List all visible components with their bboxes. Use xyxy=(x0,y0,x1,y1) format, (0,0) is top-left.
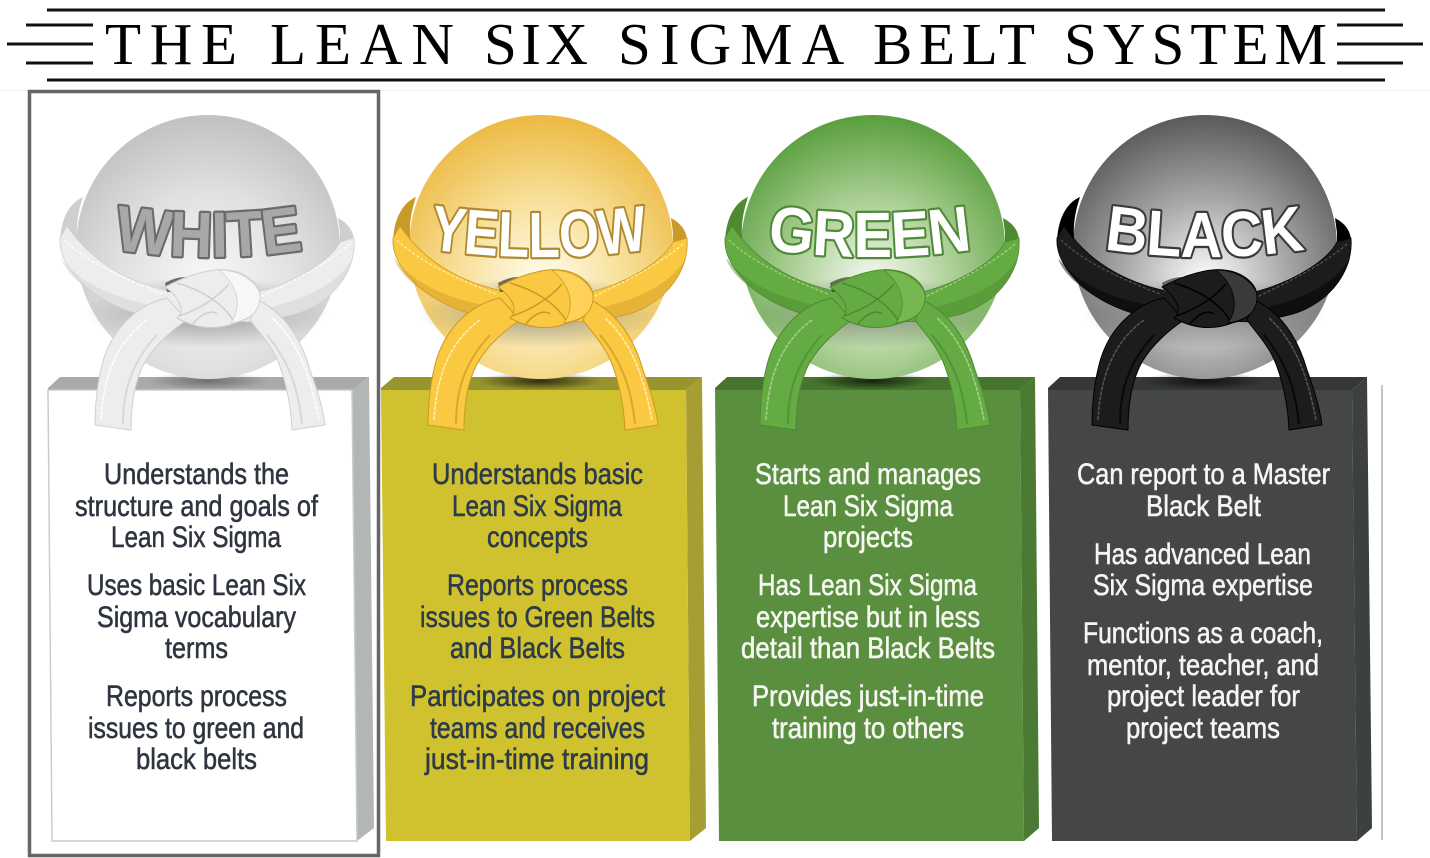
title: THE xyxy=(105,11,237,77)
black belt knot xyxy=(1057,197,1351,430)
yellow label xyxy=(433,203,646,260)
yellow belt description xyxy=(410,458,665,776)
yellow belt description: Lean Six Sigma xyxy=(452,490,622,523)
yellow belt knot xyxy=(393,197,687,430)
white sphere xyxy=(76,115,340,379)
yellow belt description: Understands basic xyxy=(432,458,643,491)
white belt description: Uses basic Lean Six xyxy=(87,569,306,602)
black belt description: Has advanced Lean xyxy=(1094,538,1311,571)
yellow belt description: Reports process xyxy=(447,569,628,602)
black belt description: project teams xyxy=(1126,712,1280,745)
black label: BLACK xyxy=(1106,204,1307,260)
black belt description xyxy=(1077,458,1330,745)
green belt description: Lean Six Sigma xyxy=(783,490,953,523)
title banner xyxy=(7,10,1423,80)
white belt description: Reports process xyxy=(106,680,287,713)
green belt description: training to others xyxy=(772,712,964,745)
green belt description: Provides just-in-time xyxy=(752,680,984,713)
green belt description: Has Lean Six Sigma xyxy=(758,569,977,602)
white belt description: Lean Six Sigma xyxy=(111,521,281,554)
green belt description: detail than Black Belts xyxy=(741,632,995,665)
green label xyxy=(770,204,970,260)
black belt description: Black Belt xyxy=(1146,490,1261,523)
yellow belt description: issues to Green Belts xyxy=(420,601,655,634)
white label xyxy=(117,204,303,260)
title: SYSTEM xyxy=(1064,11,1327,77)
green belt description: expertise but in less xyxy=(756,601,980,634)
black belt description: Six Sigma expertise xyxy=(1093,569,1313,602)
yellow belt description: and Black Belts xyxy=(450,632,625,665)
white belt description: structure and goals of xyxy=(75,490,319,523)
green belt description: Starts and manages xyxy=(755,458,981,491)
green belt description xyxy=(741,458,995,745)
panel: black belt xyxy=(1048,115,1372,841)
white belt description xyxy=(75,458,319,776)
title: SIGMA xyxy=(618,11,845,77)
white belt description: black belts xyxy=(136,743,257,776)
yellow belt description: Participates on project xyxy=(410,680,665,713)
green book block xyxy=(715,377,1039,841)
black belt description: project leader for xyxy=(1107,680,1300,713)
white belt description: issues to green and xyxy=(88,712,304,745)
title: BELT xyxy=(873,11,1035,77)
black label xyxy=(1106,204,1307,260)
white belt description: Sigma vocabulary xyxy=(97,601,296,634)
black belt description: Functions as a coach, xyxy=(1083,617,1323,650)
white book block xyxy=(48,377,374,841)
title: SIX xyxy=(484,11,588,77)
black book block xyxy=(1048,377,1372,841)
yellow belt description: just-in-time training xyxy=(424,743,649,776)
highlight frame around white belt xyxy=(30,92,378,856)
yellow belt description: concepts xyxy=(487,521,588,554)
yellow belt description: teams and receives xyxy=(430,712,645,745)
yellow book block xyxy=(381,377,706,841)
white belt knot xyxy=(60,197,354,430)
green belt description: projects xyxy=(823,521,913,554)
green sphere xyxy=(741,115,1005,379)
yellow sphere xyxy=(409,115,673,379)
yellow label: YELLOW xyxy=(433,203,646,260)
white belt description: Understands the xyxy=(104,458,289,491)
black belt description: Can report to a Master xyxy=(1077,458,1330,491)
panel: yellow belt xyxy=(381,115,706,841)
white belt description: terms xyxy=(165,632,228,665)
green label: GREEN xyxy=(770,204,970,260)
green belt knot xyxy=(725,197,1019,430)
white label: WHITE xyxy=(117,204,303,260)
black sphere xyxy=(1073,115,1337,379)
black belt description: mentor, teacher, and xyxy=(1087,649,1319,682)
title: LEAN xyxy=(270,11,454,77)
panel: green belt xyxy=(715,115,1039,841)
panel: white belt xyxy=(47,115,374,842)
